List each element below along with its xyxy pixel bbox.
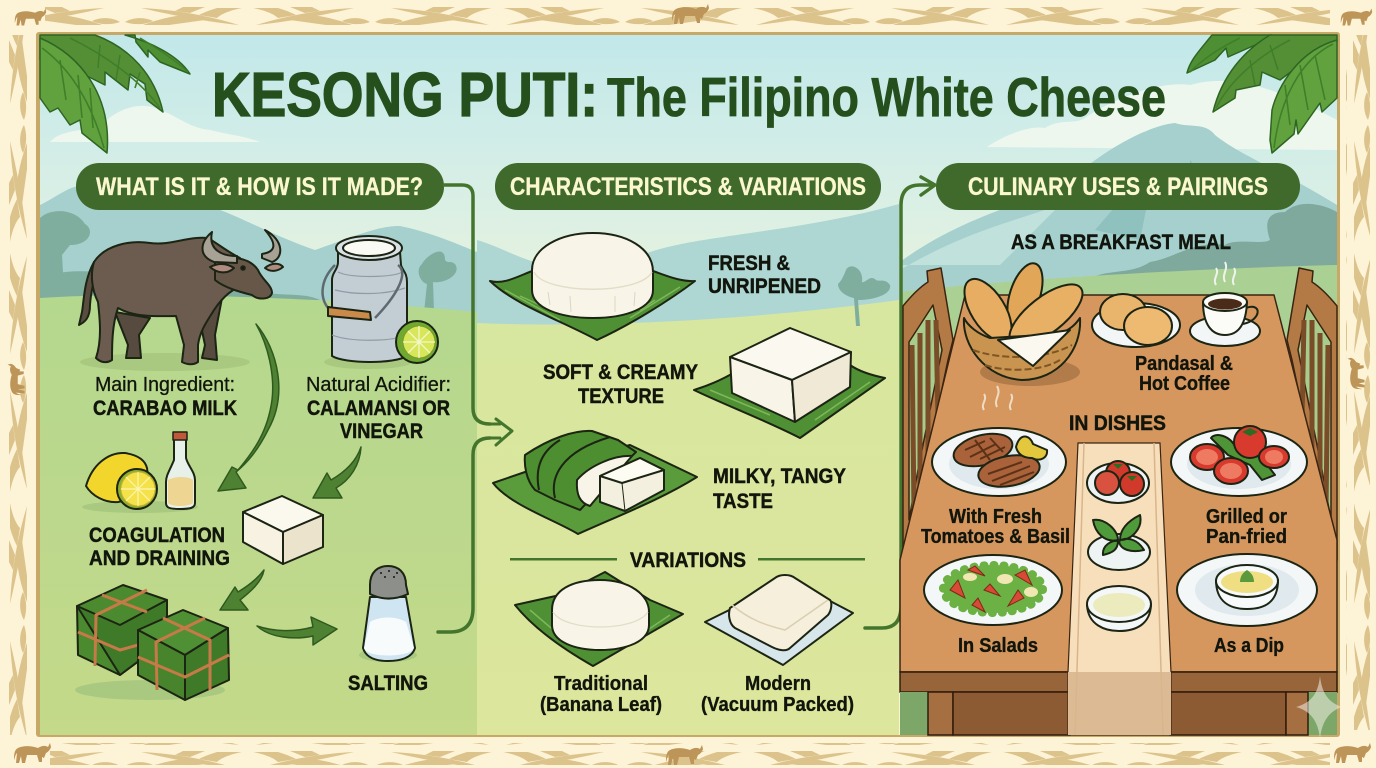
icon: salt shaker — [359, 566, 417, 662]
section header: characteristics — [495, 163, 881, 210]
text: modern — [701, 673, 854, 716]
text: fresh and unripened: UNRIPENED — [708, 275, 821, 298]
palm leaves: top left — [40, 35, 190, 153]
text: salting: SALTING — [348, 672, 428, 695]
text: traditional — [540, 673, 662, 716]
text: natural acidifier: CALAMANSI OR — [307, 397, 450, 420]
text: table labels: Tomatoes & Basil — [921, 526, 1070, 548]
text: coagulation and draining: COAGULATION — [89, 524, 225, 547]
title — [212, 61, 1166, 130]
icon: fresh round cheese on banana leaf — [490, 233, 695, 340]
icon: leaf wrapped cheese slices — [493, 431, 697, 534]
icon: dip plate — [1177, 554, 1317, 626]
palm leaves: top right — [1187, 35, 1337, 153]
text: table labels: As a Dip — [1214, 635, 1284, 657]
title: KESONG PUTI: — [212, 61, 598, 130]
text: soft and creamy — [543, 361, 698, 408]
icon: soft cheese block on leaf — [694, 328, 885, 438]
text: coagulation and draining — [89, 524, 230, 570]
icon: sparkle watermark — [1296, 676, 1342, 739]
text: milky tangy taste: TASTE — [713, 490, 773, 513]
arrow: milk to coagulation — [218, 324, 279, 491]
text: coagulation and draining: AND DRAINING — [89, 547, 230, 570]
arrow: wrapped cheese to salting — [257, 617, 337, 645]
section header: what is it — [76, 163, 444, 210]
icon: lemon and vinegar bottle — [82, 432, 198, 513]
text: table labels: Pandasal & — [1135, 353, 1233, 375]
icon: traditional banana leaf cheese — [515, 572, 683, 666]
icon: wrapped cheese packages — [75, 585, 229, 700]
text: soft and creamy: SOFT & CREAMY — [543, 361, 698, 384]
table apron and legs — [900, 672, 1337, 735]
text: table labels — [921, 231, 1287, 657]
text: fresh and unripened: FRESH & — [708, 252, 790, 275]
text: traditional: (Banana Leaf) — [540, 694, 662, 716]
arrow: connector from second to third section — [865, 177, 935, 628]
text: table labels: Grilled or — [1206, 506, 1287, 528]
text: milky tangy taste: MILKY, TANGY — [713, 465, 846, 488]
text: table labels: Pan-fried — [1206, 526, 1287, 548]
text: main ingredient: CARABAO MILK — [93, 397, 237, 420]
text: table labels: In Salads — [958, 635, 1038, 657]
arrow: cheese to wrapped cheese — [220, 570, 264, 610]
text: table labels: Hot Coffee — [1139, 373, 1230, 395]
text: milky tangy taste — [713, 465, 846, 513]
icon: grilled cheese plate — [932, 386, 1066, 496]
text: natural acidifier — [306, 374, 451, 443]
text: natural acidifier: Natural Acidifier: — [306, 374, 451, 396]
text: table labels: With Fresh — [949, 506, 1042, 528]
table scene — [900, 268, 1337, 735]
icon: carabao — [79, 230, 283, 371]
icon: tomato and basil plate — [1171, 426, 1307, 496]
chair: right — [1287, 268, 1337, 560]
text: fresh and unripened — [708, 252, 821, 298]
section header: characteristics: CHARACTERISTICS & VARIATIONS — [510, 173, 866, 201]
text: main ingredient: Main Ingredient: — [95, 374, 235, 396]
text: table labels: AS A BREAKFAST MEAL — [1011, 231, 1231, 254]
text: traditional: Traditional — [554, 673, 648, 695]
text: soft and creamy: TEXTURE — [578, 385, 664, 408]
table top — [900, 295, 1337, 672]
title: The Filipino White Cheese — [607, 66, 1166, 128]
arrow: acidifier to cheese — [313, 447, 361, 498]
icon: milk can — [323, 236, 438, 369]
section header: culinary uses: CULINARY USES & PAIRINGS — [968, 173, 1268, 201]
text: natural acidifier: VINEGAR — [340, 420, 423, 443]
icon: basil on runner — [1088, 515, 1150, 570]
section header: culinary uses — [936, 163, 1300, 210]
text: table labels: IN DISHES — [1069, 412, 1166, 435]
heading: variations: VARIATIONS — [630, 549, 746, 572]
icon: pandesal plate — [1092, 294, 1180, 347]
text: modern: (Vacuum Packed) — [701, 694, 854, 716]
icon: dip bowl on runner — [1087, 586, 1151, 631]
icon: hot coffee — [1190, 262, 1260, 346]
icon: bread basket — [955, 259, 1092, 386]
chair: left — [903, 268, 953, 560]
table runner — [1068, 443, 1171, 735]
icon: cheese cube — [243, 496, 323, 564]
text: modern: Modern — [745, 673, 811, 695]
icon: tomatoes on runner — [1087, 461, 1149, 503]
section header: what is it: WHAT IS IT & HOW IS IT MADE? — [96, 173, 423, 201]
text: main ingredient — [93, 374, 237, 420]
icon: modern vacuum packed cheese — [705, 575, 853, 665]
arrow: connector from first to second section — [438, 185, 512, 632]
icon: salad plate — [924, 555, 1062, 625]
